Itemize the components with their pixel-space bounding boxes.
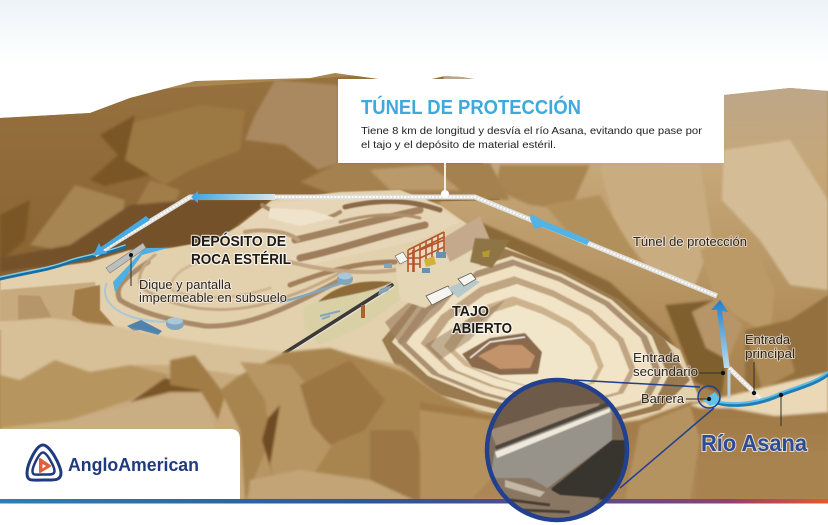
callout: tunel de proteccion: el tajo y el depósito de material estéril. xyxy=(361,139,556,151)
label: entrada secundario xyxy=(633,350,725,379)
plant area xyxy=(303,216,510,345)
tunnel route xyxy=(95,197,760,398)
sand plain and waste rock deposit base xyxy=(0,190,700,440)
callout: tunel de proteccion xyxy=(338,79,724,198)
river asana xyxy=(0,245,828,406)
waste rock terraces xyxy=(118,201,440,326)
label: dique y pantalla: impermeable en subsuelo xyxy=(139,290,287,305)
flow arrows xyxy=(93,191,730,368)
label: entrada secundario: Entrada xyxy=(633,350,681,365)
right foreground xyxy=(420,372,828,500)
open pit xyxy=(382,240,690,425)
icon: anglo american logo xyxy=(27,445,61,480)
heading: deposito de roca esteril: DEPÓSITO DE xyxy=(191,232,286,250)
logo panel xyxy=(0,429,240,499)
headframe xyxy=(408,232,446,273)
logo panel: AngloAmerican xyxy=(68,455,199,475)
buildings xyxy=(384,250,490,305)
label: rio asana: Río Asana xyxy=(701,430,807,456)
heading: tajo abierto: ABIERTO xyxy=(452,320,512,337)
label: dique y pantalla xyxy=(129,253,287,305)
label: barrera: Barrera xyxy=(641,391,685,406)
tanks and pond xyxy=(127,272,353,335)
foreground hills xyxy=(0,318,560,500)
label: entrada secundario: secundario xyxy=(633,364,698,379)
callout: tunel de proteccion: Tiene 8 km de longitud y desvía el río Asana, evitando que pase por xyxy=(361,125,703,137)
callout: tunel de proteccion: TÚNEL DE PROTECCIÓN xyxy=(361,95,581,119)
heading: tajo abierto: TAJO xyxy=(452,303,489,320)
sky xyxy=(0,0,828,62)
label: tunel de proteccion: Túnel de protección xyxy=(633,234,747,249)
inset photo: barrier xyxy=(485,378,630,525)
left mountain xyxy=(0,70,510,290)
label: entrada principal xyxy=(745,332,795,395)
label: entrada principal: Entrada xyxy=(745,332,791,347)
label: barrera xyxy=(641,391,711,406)
heading: deposito de roca esteril: ROCA ESTÉRIL xyxy=(191,251,291,268)
label: entrada principal: principal xyxy=(745,346,795,361)
magnifier connector xyxy=(574,380,720,488)
label: rio asana xyxy=(701,393,807,456)
conveyor xyxy=(283,285,394,356)
label: dique y pantalla: Dique y pantalla xyxy=(139,277,232,292)
bottom gradient bar xyxy=(0,499,828,504)
dam and water xyxy=(105,243,345,322)
left hollow xyxy=(0,282,115,327)
